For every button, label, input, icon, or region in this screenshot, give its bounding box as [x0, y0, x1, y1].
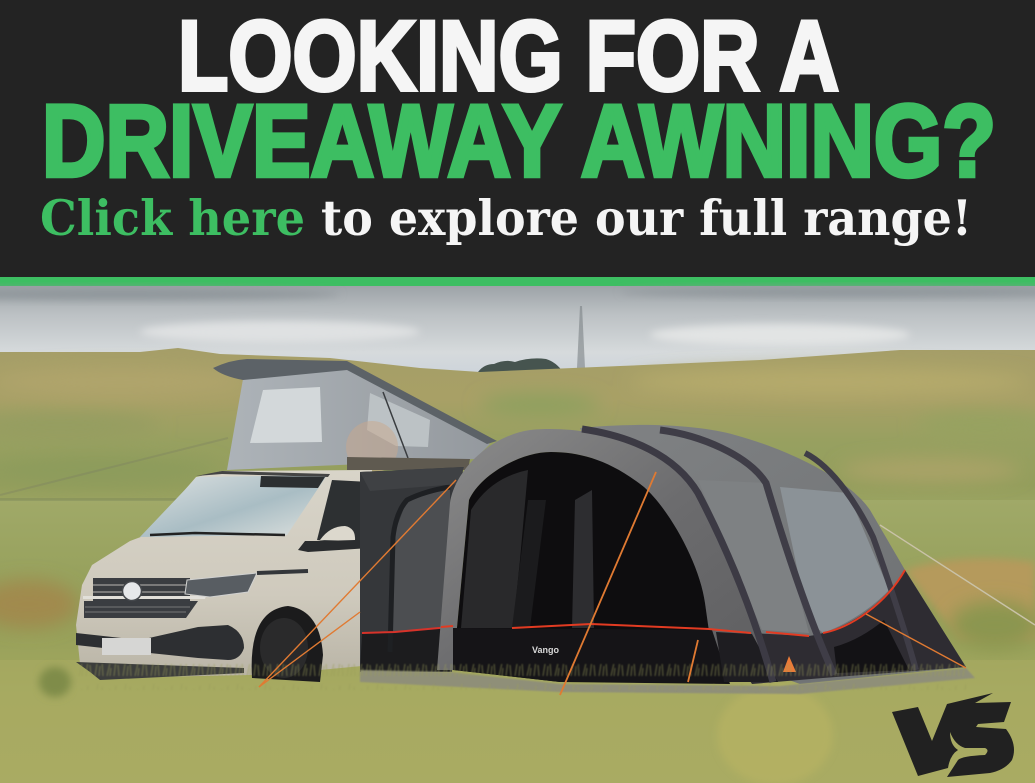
- inner fabric: [572, 490, 594, 628]
- radio mast: [577, 306, 585, 368]
- call to action: Click here: Click here: [40, 189, 305, 247]
- stone walls: [0, 438, 228, 495]
- front wheel: [252, 606, 323, 682]
- van with pop-top roof: [76, 359, 497, 682]
- logo flag: [783, 656, 796, 672]
- ground sheet: [360, 668, 975, 694]
- roof shell: [213, 359, 497, 444]
- air beam 3: [805, 453, 916, 670]
- grass field band: [0, 498, 210, 501]
- green divider bar: [0, 277, 1035, 286]
- guy ropes: [259, 472, 1035, 695]
- lower splitter: [76, 662, 244, 680]
- red piping: [441, 570, 905, 636]
- arch lower skirt: [716, 632, 778, 682]
- front arch beam: [437, 429, 769, 681]
- air beam 2: [660, 430, 834, 675]
- front opening: [453, 452, 716, 682]
- headlight: [185, 573, 257, 597]
- inner tent panel left: [461, 470, 528, 628]
- hills: [0, 348, 1035, 520]
- van body: [76, 470, 372, 678]
- foreground grass blades: [76, 664, 966, 690]
- photo background: [0, 286, 1035, 783]
- window strut: [383, 392, 408, 458]
- grass meadow: [0, 500, 1035, 783]
- Vango logo: Vango: [532, 645, 560, 655]
- rear vestibule opening: [834, 620, 909, 673]
- roof edge: [196, 471, 330, 477]
- sky: [0, 286, 1035, 381]
- airbeam tent: [76, 425, 975, 694]
- trim line: [257, 571, 308, 573]
- roof window right: [367, 393, 430, 447]
- awning annex: [360, 467, 464, 672]
- wipers: [150, 533, 285, 535]
- lower dark skirt: [716, 570, 966, 684]
- mesh window: [780, 487, 889, 633]
- sun visor: [260, 476, 325, 488]
- pop-top roof fabric: [213, 359, 497, 473]
- roof rack: [347, 457, 470, 470]
- wing mirror: [298, 526, 370, 552]
- dry reeds left: [0, 580, 78, 628]
- front grille: [83, 578, 206, 618]
- tent rear canopy: [580, 425, 966, 684]
- hill texture: [0, 368, 1035, 484]
- sun flare: [346, 421, 398, 473]
- air beam 1: [582, 429, 773, 682]
- inner door fold: [512, 500, 546, 628]
- ground floor band: [453, 628, 730, 684]
- side panel: [698, 480, 809, 633]
- roof window left: [250, 387, 322, 443]
- call to action: explore range: to explore our full range!: [321, 189, 972, 247]
- windscreen: [140, 475, 327, 537]
- side window: [317, 480, 370, 547]
- bumper intake: [76, 625, 244, 660]
- title line: Looking for a: LOOKING FOR A: [178, 0, 839, 111]
- dry reeds right: [905, 558, 1035, 640]
- VW badge: [122, 582, 142, 600]
- foreground grass: [0, 660, 1035, 783]
- header banner: [0, 0, 1035, 277]
- distant trees: [478, 358, 563, 372]
- number plate: [102, 638, 151, 655]
- VS logo: [892, 693, 1014, 777]
